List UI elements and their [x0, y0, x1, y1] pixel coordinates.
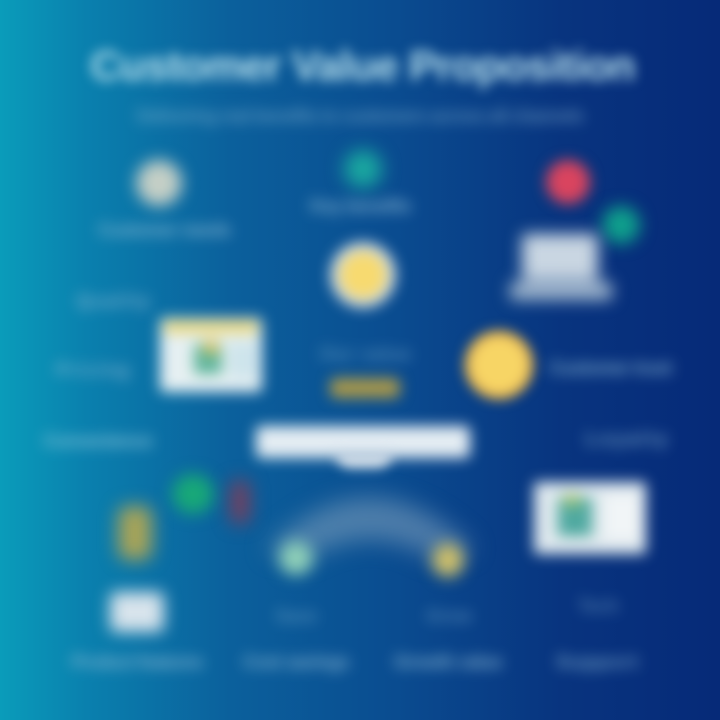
banner: centre white bar	[256, 426, 470, 458]
label: bottom 2: Cost savings	[243, 652, 349, 672]
icon: yellow small circle	[432, 543, 464, 577]
label: left lower: Convenience	[44, 431, 152, 451]
label: bottom 3 small: Grow	[426, 606, 472, 626]
icon: green circle	[172, 474, 214, 514]
icon: centre yellow circle	[320, 232, 406, 318]
label: centre heading: Our value	[320, 344, 412, 364]
icon: left screen card	[148, 306, 274, 404]
icon: yellow tall block	[118, 506, 152, 560]
label: top centre: Key benefits	[310, 196, 411, 216]
subtitle: Delivering real benefits to customers across all channels	[136, 106, 584, 126]
label: left upper: Quality	[76, 291, 152, 311]
arc: lower connector	[262, 485, 478, 568]
icon: top right teal badge	[602, 206, 640, 244]
label: left middle: Pricing	[56, 360, 131, 380]
icon: laptop	[500, 221, 622, 312]
label: bottom 3: Growth value	[394, 652, 502, 672]
label: top left: Customer needs	[98, 220, 231, 240]
label: right middle: Customer trust	[549, 358, 672, 378]
label: bottom 4: Support	[556, 652, 640, 672]
label: bottom 1: Product features	[71, 652, 203, 672]
label: bottom 2 small: Save	[275, 606, 317, 626]
label: bottom 4 small: Tech	[578, 596, 619, 616]
icon: top centre circle	[344, 150, 382, 188]
icon: red small bar	[230, 480, 250, 524]
icon: mint circle	[279, 541, 313, 575]
icon: top right circle	[546, 160, 590, 204]
icon: banner pointer	[336, 452, 392, 468]
icon: right yellow circle	[454, 320, 544, 410]
title: Customer Value Proposition	[90, 42, 635, 89]
icon: right screen card	[522, 470, 658, 566]
label: right lower: Loyalty	[586, 429, 670, 449]
icon: top left circle	[136, 160, 182, 206]
icon: white box	[110, 592, 164, 632]
icon: centre yellow bar	[330, 378, 400, 398]
